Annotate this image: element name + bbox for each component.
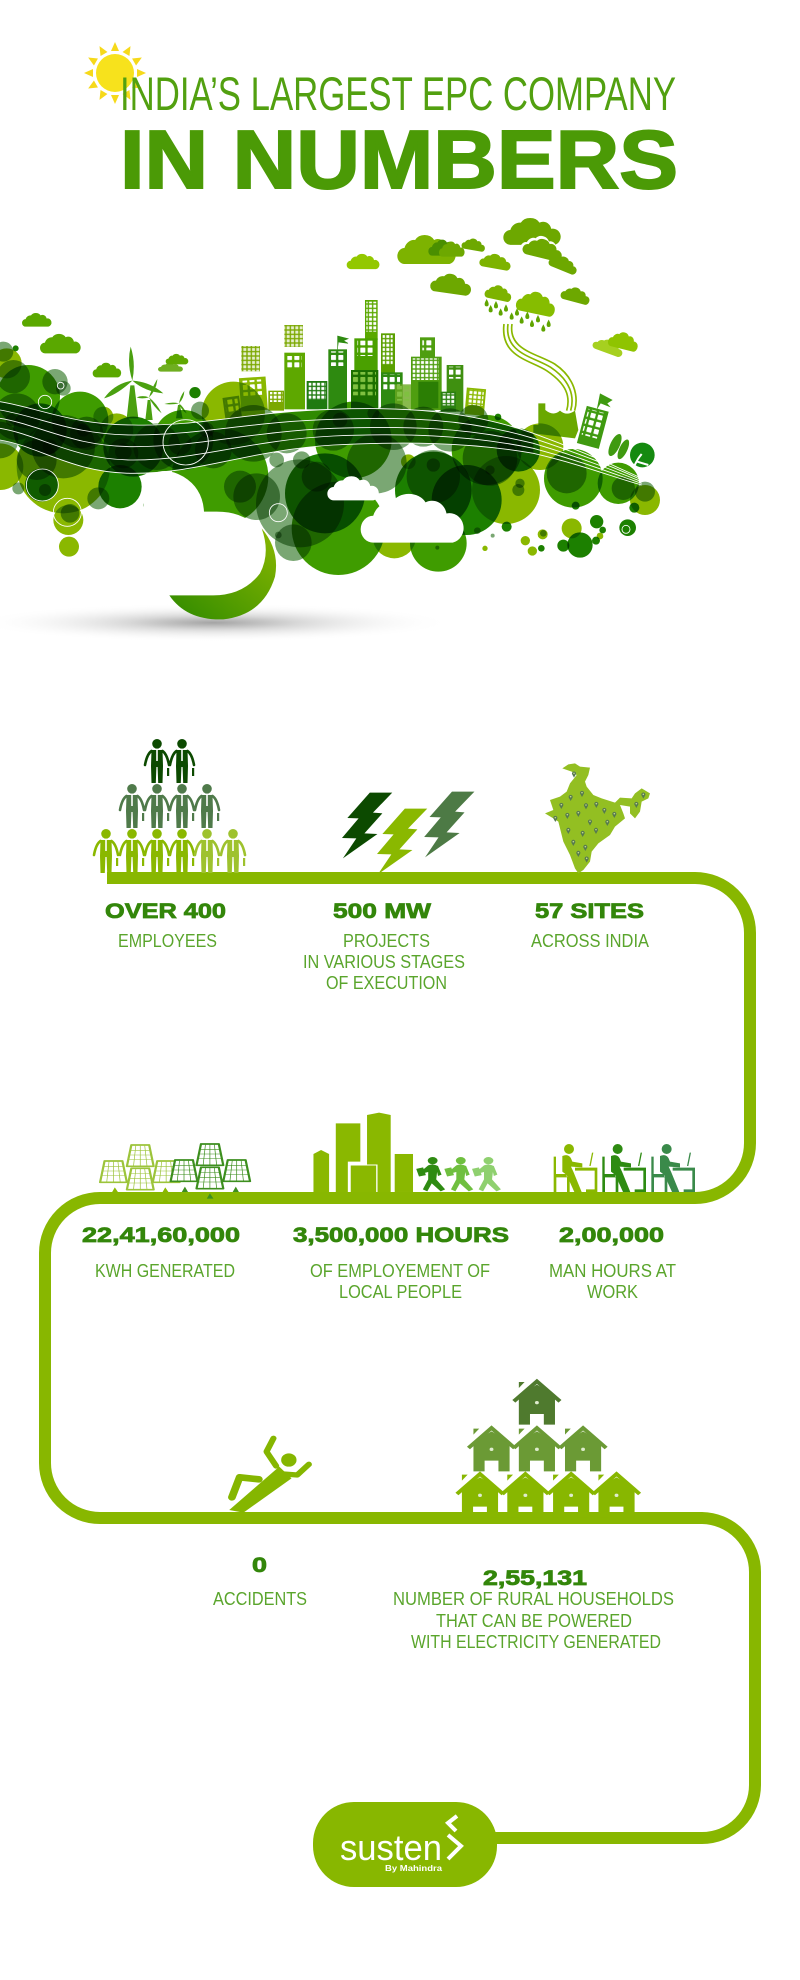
stat: hours of employment: LOCAL PEOPLE [339,1281,462,1302]
sun icon [84,42,146,104]
icon: employee pyramid [94,739,245,873]
wind turbines [104,347,187,420]
icon: India map with pins [545,763,650,873]
stat: 500 MW projects: 500 MW [333,899,432,923]
stat: over 400 employees [105,899,226,951]
icon: walking people [416,1157,501,1191]
white rings [26,382,630,533]
green city illustration [0,218,660,642]
title: in numbers: IN NUMBERS [120,113,678,206]
stat: kWh generated [82,1223,240,1281]
stat: man hours: WORK [587,1281,639,1302]
stat: 500 MW projects: PROJECTS [343,930,430,951]
icon: lightning bolts [342,792,474,874]
overlapping green circles [0,342,660,575]
water stream [504,324,576,411]
stat: 500 MW projects: IN VARIOUS STAGES [303,951,465,972]
icon: city buildings [313,1113,413,1192]
stat: hours of employment: OF EMPLOYEMENT OF [310,1260,490,1281]
icon: solar panels [100,1144,250,1199]
stat: kWh generated: 22,41,60,000 [82,1223,240,1247]
stat: over 400 employees: EMPLOYEES [118,930,217,951]
stat: 500 MW projects [303,899,465,993]
stat: zero accidents: 0 [252,1553,267,1577]
logo pill: By Mahindra [385,1864,443,1873]
stat: 500 MW projects: OF EXECUTION [326,972,447,993]
stat: rural households: 2,55,131 [483,1566,587,1590]
connecting green path [45,878,755,1838]
stat: 57 sites: 57 SITES [535,899,644,923]
stat: man hours: 2,00,000 [559,1223,664,1247]
icon: people at desks [554,1144,695,1192]
stat: zero accidents: ACCIDENTS [213,1588,307,1609]
stat: man hours [549,1223,676,1302]
icon: falling man [229,1438,309,1513]
logo pill: susten [340,1827,442,1868]
white big cloud cut-out and crescent [143,471,276,619]
stat: rural households: NUMBER OF RURAL HOUSEHOLDS [393,1588,674,1609]
factory and trees [533,393,655,471]
ground shadow [0,603,453,642]
white clouds [327,476,464,543]
white wave lines [0,402,642,485]
stat: kWh generated: KWH GENERATED [95,1260,235,1281]
stat: hours of employment: 3,500,000 HOURS [293,1223,509,1247]
clouds [22,218,640,377]
stat: man hours: MAN HOURS AT [549,1260,676,1281]
stat: hours of employment [293,1223,509,1302]
rain drops [485,299,551,332]
city buildings [222,300,486,421]
stat: 57 sites: ACROSS INDIA [531,930,650,951]
wave band base [0,402,533,473]
logo pill [313,1802,497,1887]
icon: houses [457,1381,640,1517]
stat: rural households: WITH ELECTRICITY GENERATED [411,1631,661,1652]
stat: over 400 employees: OVER 400 [105,899,226,923]
stat: 57 sites [531,899,650,951]
stat: rural households: THAT CAN BE POWERED [436,1610,632,1631]
stat: rural households [393,1566,674,1652]
stat: zero accidents [213,1553,307,1609]
